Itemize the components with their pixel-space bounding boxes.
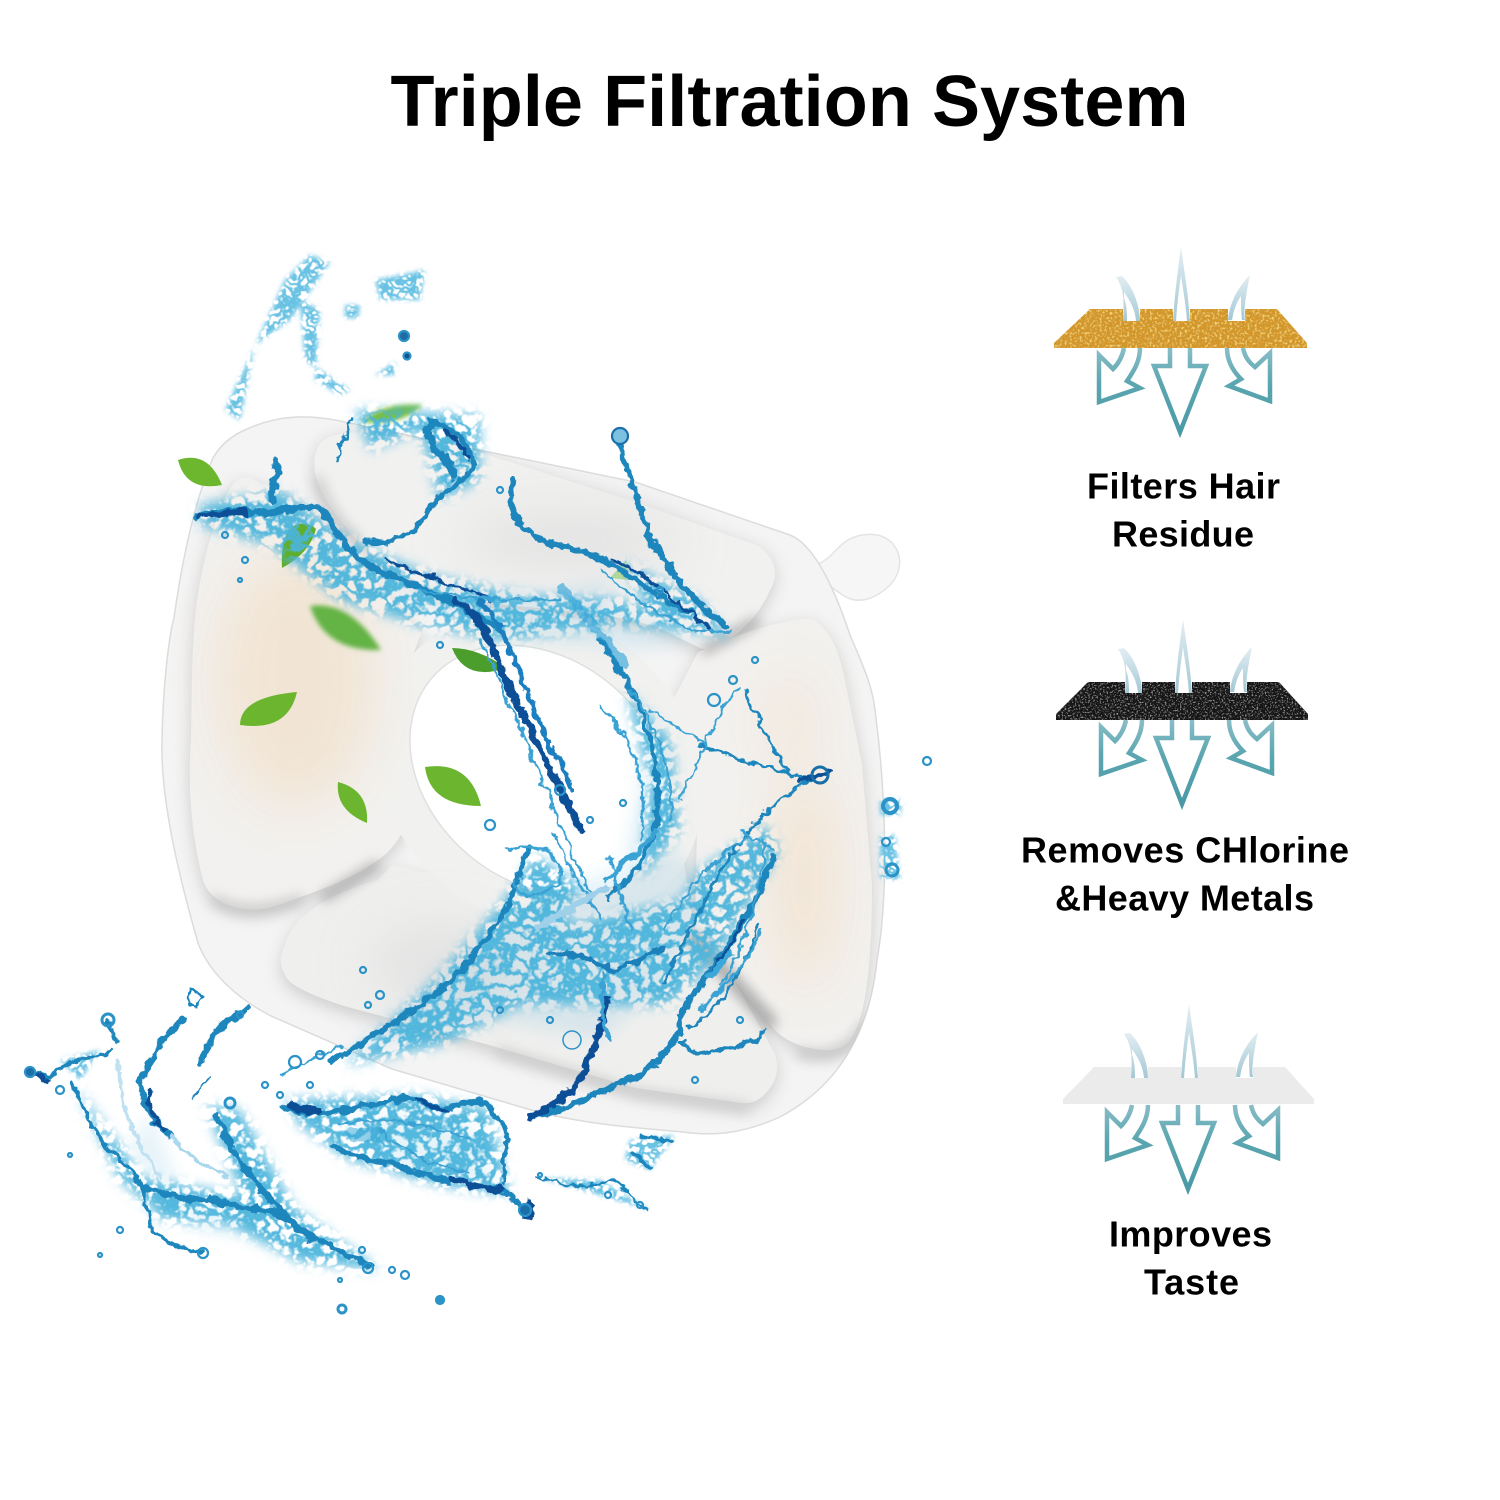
grey pad centres xyxy=(394,515,641,990)
leaf 9 faint xyxy=(610,560,629,580)
water tint washes xyxy=(130,580,710,1240)
water main streams xyxy=(30,417,828,1267)
pale incoming arrows xyxy=(1175,619,1192,694)
leaf 6 xyxy=(425,766,481,806)
water droplets xyxy=(25,331,931,1313)
label 1: Residue xyxy=(1112,514,1254,554)
pale incoming arrows xyxy=(1173,247,1190,322)
leaf 1 xyxy=(178,458,222,486)
water dark cores xyxy=(30,430,828,1217)
leaf 7 blurred xyxy=(362,405,423,423)
leaf 5 xyxy=(338,782,367,823)
pale incoming arrows xyxy=(1181,1004,1198,1079)
label 3: Improves xyxy=(1109,1214,1272,1254)
pull tab xyxy=(818,534,900,600)
filter icon 2: black carbon filter xyxy=(1056,619,1308,804)
bottom pad xyxy=(281,864,777,1103)
central ring surface xyxy=(392,610,698,863)
title: Triple Filtration System xyxy=(390,62,1188,142)
teal outflow arrows xyxy=(1107,1105,1278,1189)
water mesh texture xyxy=(75,410,780,1270)
leaf 2 xyxy=(282,524,316,568)
left pad xyxy=(190,478,421,910)
leaf 8 behind water xyxy=(452,648,506,672)
label 2: &Heavy Metals xyxy=(1055,878,1314,918)
filter icon 1: orange hair filter xyxy=(1054,247,1307,432)
leaf 3 blurred xyxy=(310,605,381,650)
teal outflow arrows xyxy=(1099,348,1270,432)
pad grooves xyxy=(215,480,865,1108)
base plate xyxy=(162,417,885,1134)
leaf 4 xyxy=(240,692,297,726)
label 3: Taste xyxy=(1144,1262,1239,1302)
label 3 xyxy=(1109,1214,1272,1302)
label 2: Removes CHlorine xyxy=(1021,830,1349,870)
black filter layer xyxy=(1056,682,1308,720)
leaves xyxy=(178,405,629,823)
pad shadows xyxy=(190,436,872,1109)
beige pad centres xyxy=(215,550,841,990)
centre hole xyxy=(360,594,720,946)
top pad xyxy=(314,432,775,649)
right pad xyxy=(673,619,872,1050)
water fine spray xyxy=(60,255,902,1210)
teal outflow arrows xyxy=(1101,720,1272,804)
water splash xyxy=(25,255,931,1313)
label 2 xyxy=(1021,830,1349,918)
filter pad product xyxy=(162,417,900,1134)
label 1: Filters Hair xyxy=(1087,466,1280,506)
water light streams xyxy=(280,570,775,1170)
orange filter layer xyxy=(1054,309,1307,348)
white filter layer xyxy=(1063,1067,1314,1104)
label 1 xyxy=(1087,466,1280,554)
filter icon 3: white cotton filter xyxy=(1063,1004,1314,1189)
